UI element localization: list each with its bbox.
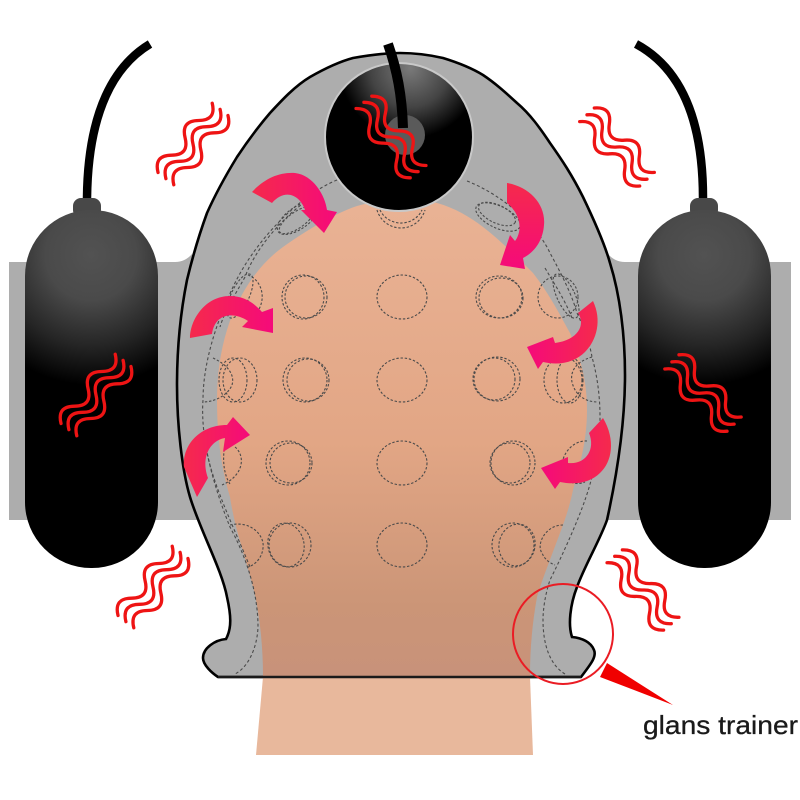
right vibrator capsule <box>638 198 771 568</box>
heat waves: bottom left <box>113 542 193 632</box>
heat waves: left capsule <box>56 350 136 440</box>
callout: pointer wedge <box>600 663 673 705</box>
cable: right vibrator wire <box>636 44 703 198</box>
sleeve body: grey trainer outline <box>177 53 625 677</box>
heat waves: top left <box>153 99 233 189</box>
callout: circle marking the glans trainer lip <box>513 584 613 684</box>
heat waves: right capsule <box>660 350 746 436</box>
massage dimples: dashed circle grid <box>203 195 598 570</box>
skin: head inside the sleeve <box>217 200 587 676</box>
cable: top vibrator wire <box>388 44 403 128</box>
arrow: top left <box>252 173 337 233</box>
heat waves: top right <box>575 103 659 191</box>
left vibrator capsule <box>25 198 158 568</box>
heat waves: bottom right <box>602 545 684 635</box>
cable: left vibrator wire <box>87 44 150 198</box>
sleeve base line <box>218 676 581 678</box>
top vibrator disc <box>325 63 473 211</box>
neck: lighter skin below the sleeve <box>256 677 533 755</box>
arrow: middle left <box>190 296 273 338</box>
label: glans trainer: glans trainer <box>643 710 798 740</box>
arrow: lower right <box>541 418 611 489</box>
heat waves: top disc <box>351 92 431 182</box>
disc hub <box>385 115 425 155</box>
arrow: top right <box>500 183 544 269</box>
arrow: lower left <box>184 417 250 497</box>
strap band: grey band behind the sleeve <box>9 254 791 520</box>
arrow: middle right <box>527 301 598 369</box>
inner dashed sleeve contours <box>203 180 600 674</box>
